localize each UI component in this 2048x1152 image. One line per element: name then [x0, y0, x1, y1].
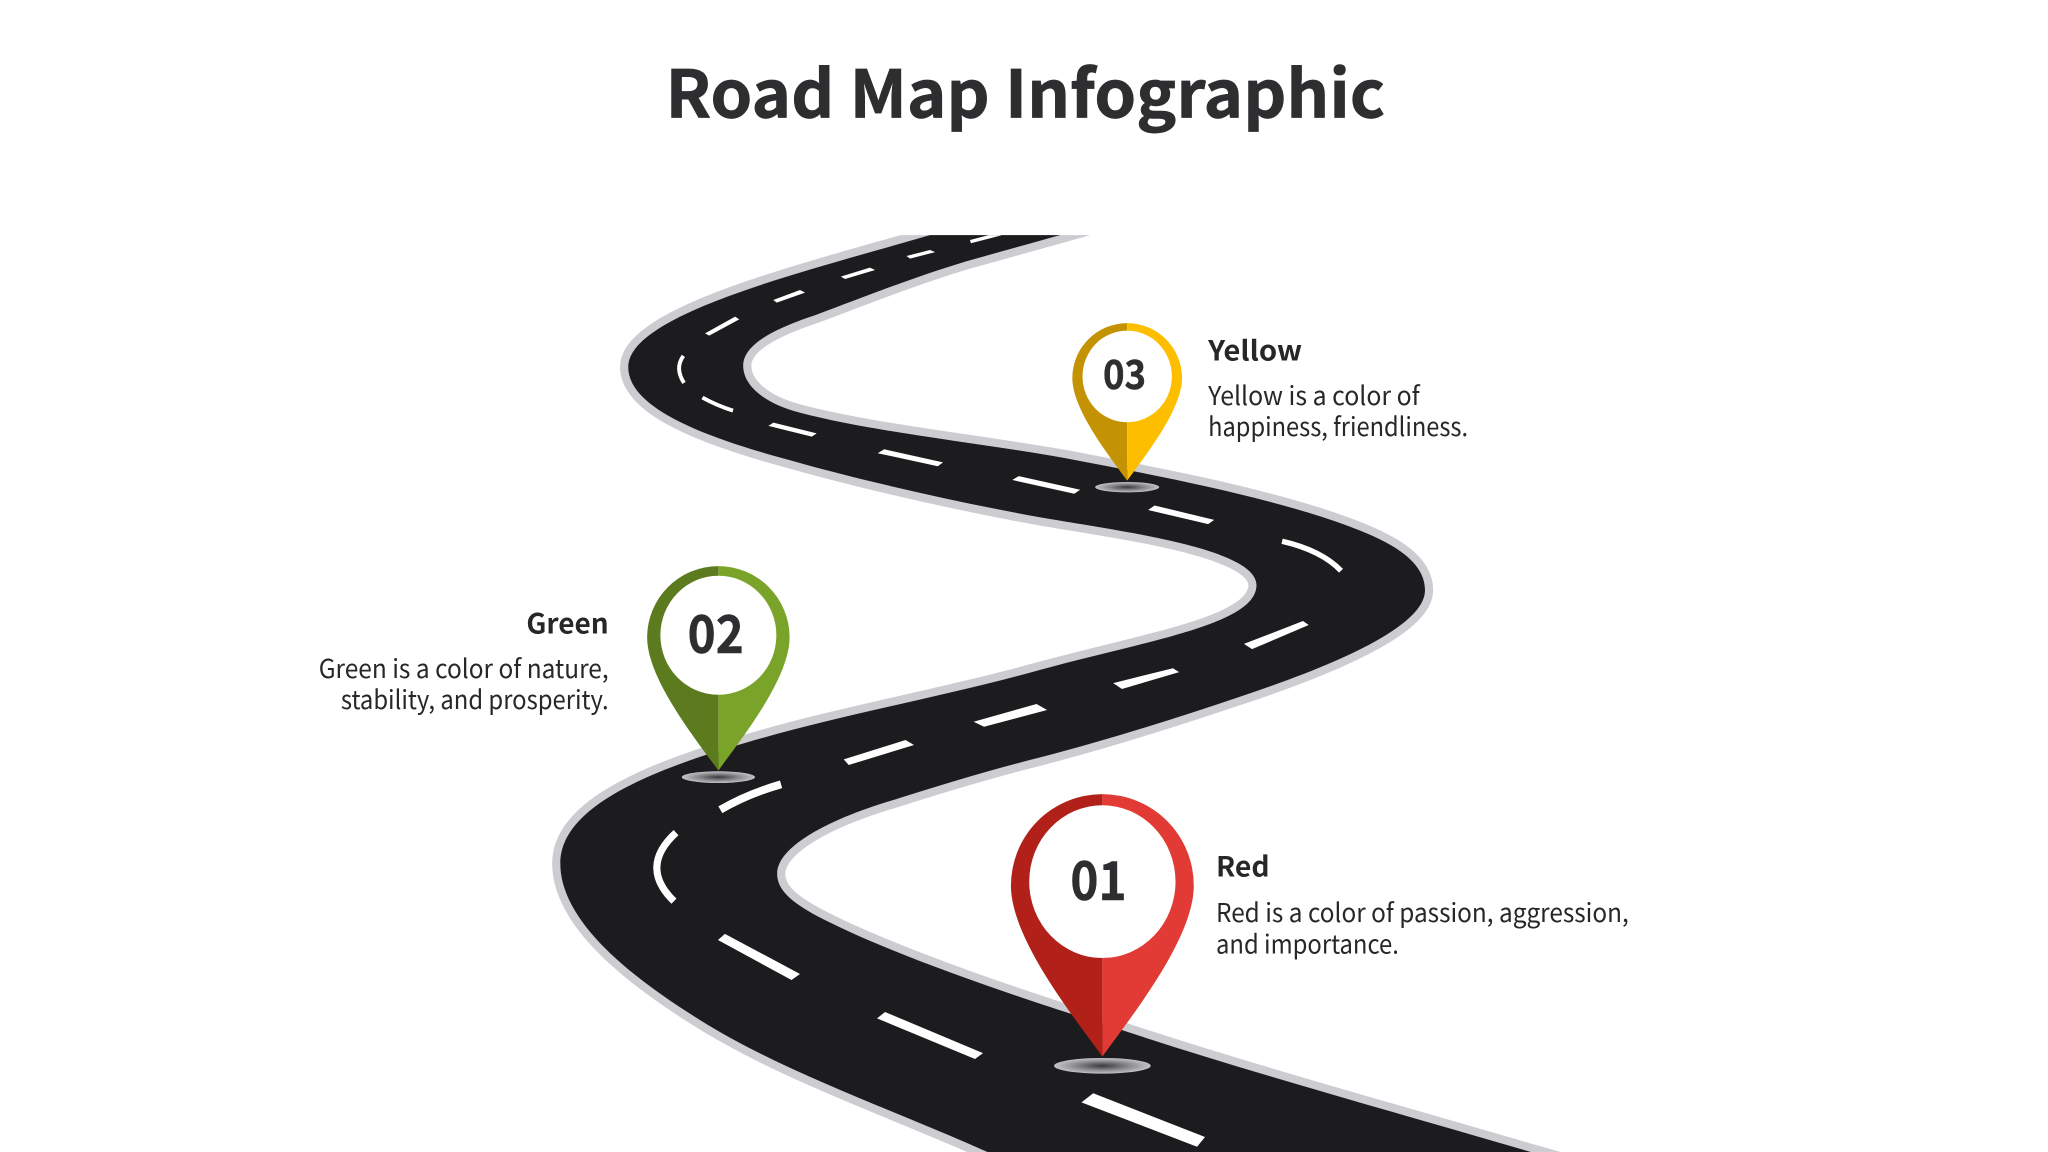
lane markings	[657, 234, 1341, 1147]
pin 01 red: 01	[1070, 839, 1127, 916]
label: yellow: Yellow	[1207, 328, 1302, 368]
label: green: Green is a color of nature,	[319, 648, 609, 686]
label: yellow: happiness, friendliness.	[1208, 406, 1468, 444]
pin 01 red	[1011, 794, 1194, 1074]
label: red: Red	[1216, 844, 1270, 884]
winding road	[560, 206, 1613, 1152]
label: red	[1216, 844, 1629, 961]
label: yellow	[1207, 328, 1468, 444]
label: yellow: Yellow is a color of	[1207, 375, 1421, 413]
label: green: Green	[526, 601, 609, 641]
road surface	[560, 235, 1530, 1152]
pin 02 green	[647, 566, 790, 783]
pin 02 green: 02	[688, 593, 744, 669]
pin 03 yellow	[1072, 323, 1182, 492]
road shoulder	[560, 206, 1613, 1152]
label: red: Red is a color of passion, aggression,	[1216, 892, 1629, 930]
label: red: and importance.	[1216, 923, 1399, 961]
label: green	[319, 601, 609, 717]
title: Road Map Infographic	[665, 42, 1385, 137]
label: green: stability, and prosperity.	[341, 679, 609, 717]
pin 03 yellow: 03	[1103, 342, 1146, 401]
